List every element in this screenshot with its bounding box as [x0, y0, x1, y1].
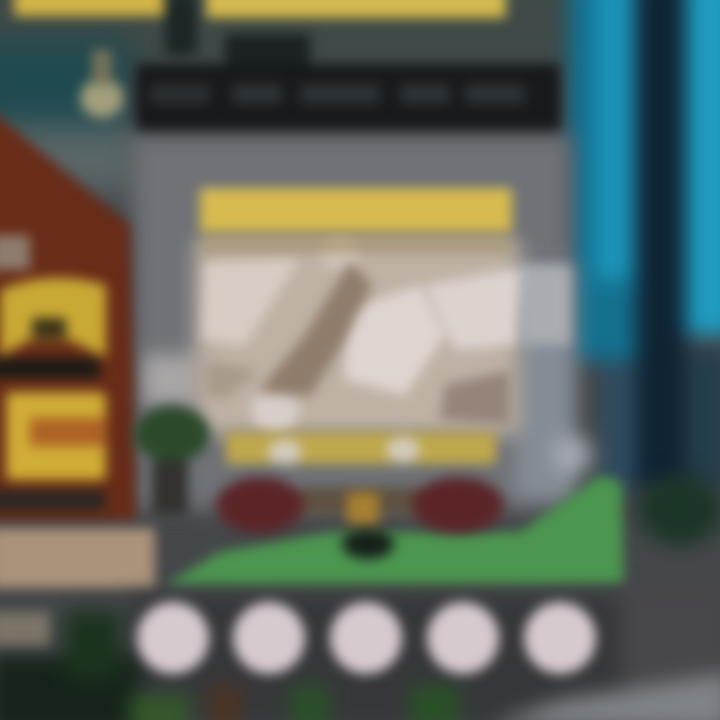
- yellow strip under mural: [226, 432, 496, 465]
- black signboard: [136, 34, 560, 130]
- badge 3: [330, 602, 402, 674]
- central figure: [342, 492, 394, 559]
- five round badges: [137, 602, 596, 674]
- badge 5: [524, 602, 596, 674]
- top yellow awnings: [14, 0, 506, 118]
- bottom ground: [0, 474, 720, 720]
- mural light patches: [202, 240, 570, 432]
- badge 4: [427, 602, 499, 674]
- left yellow signs: [0, 278, 106, 510]
- map mural: [195, 240, 570, 435]
- mural base: [195, 240, 520, 435]
- badge 2: [233, 602, 305, 674]
- badge 1: [137, 602, 209, 674]
- green lawn: [165, 475, 624, 585]
- beige pavement left: [0, 528, 155, 648]
- small plant: [134, 406, 210, 516]
- grey building facade: [132, 135, 592, 510]
- right cyan windows and dark column: [568, 0, 720, 490]
- red flower beds: [216, 477, 504, 533]
- brown house wall and roof: [0, 105, 136, 520]
- yellow banner: [200, 188, 512, 252]
- mural dark diagonal: [205, 262, 510, 425]
- upper background: [0, 0, 590, 195]
